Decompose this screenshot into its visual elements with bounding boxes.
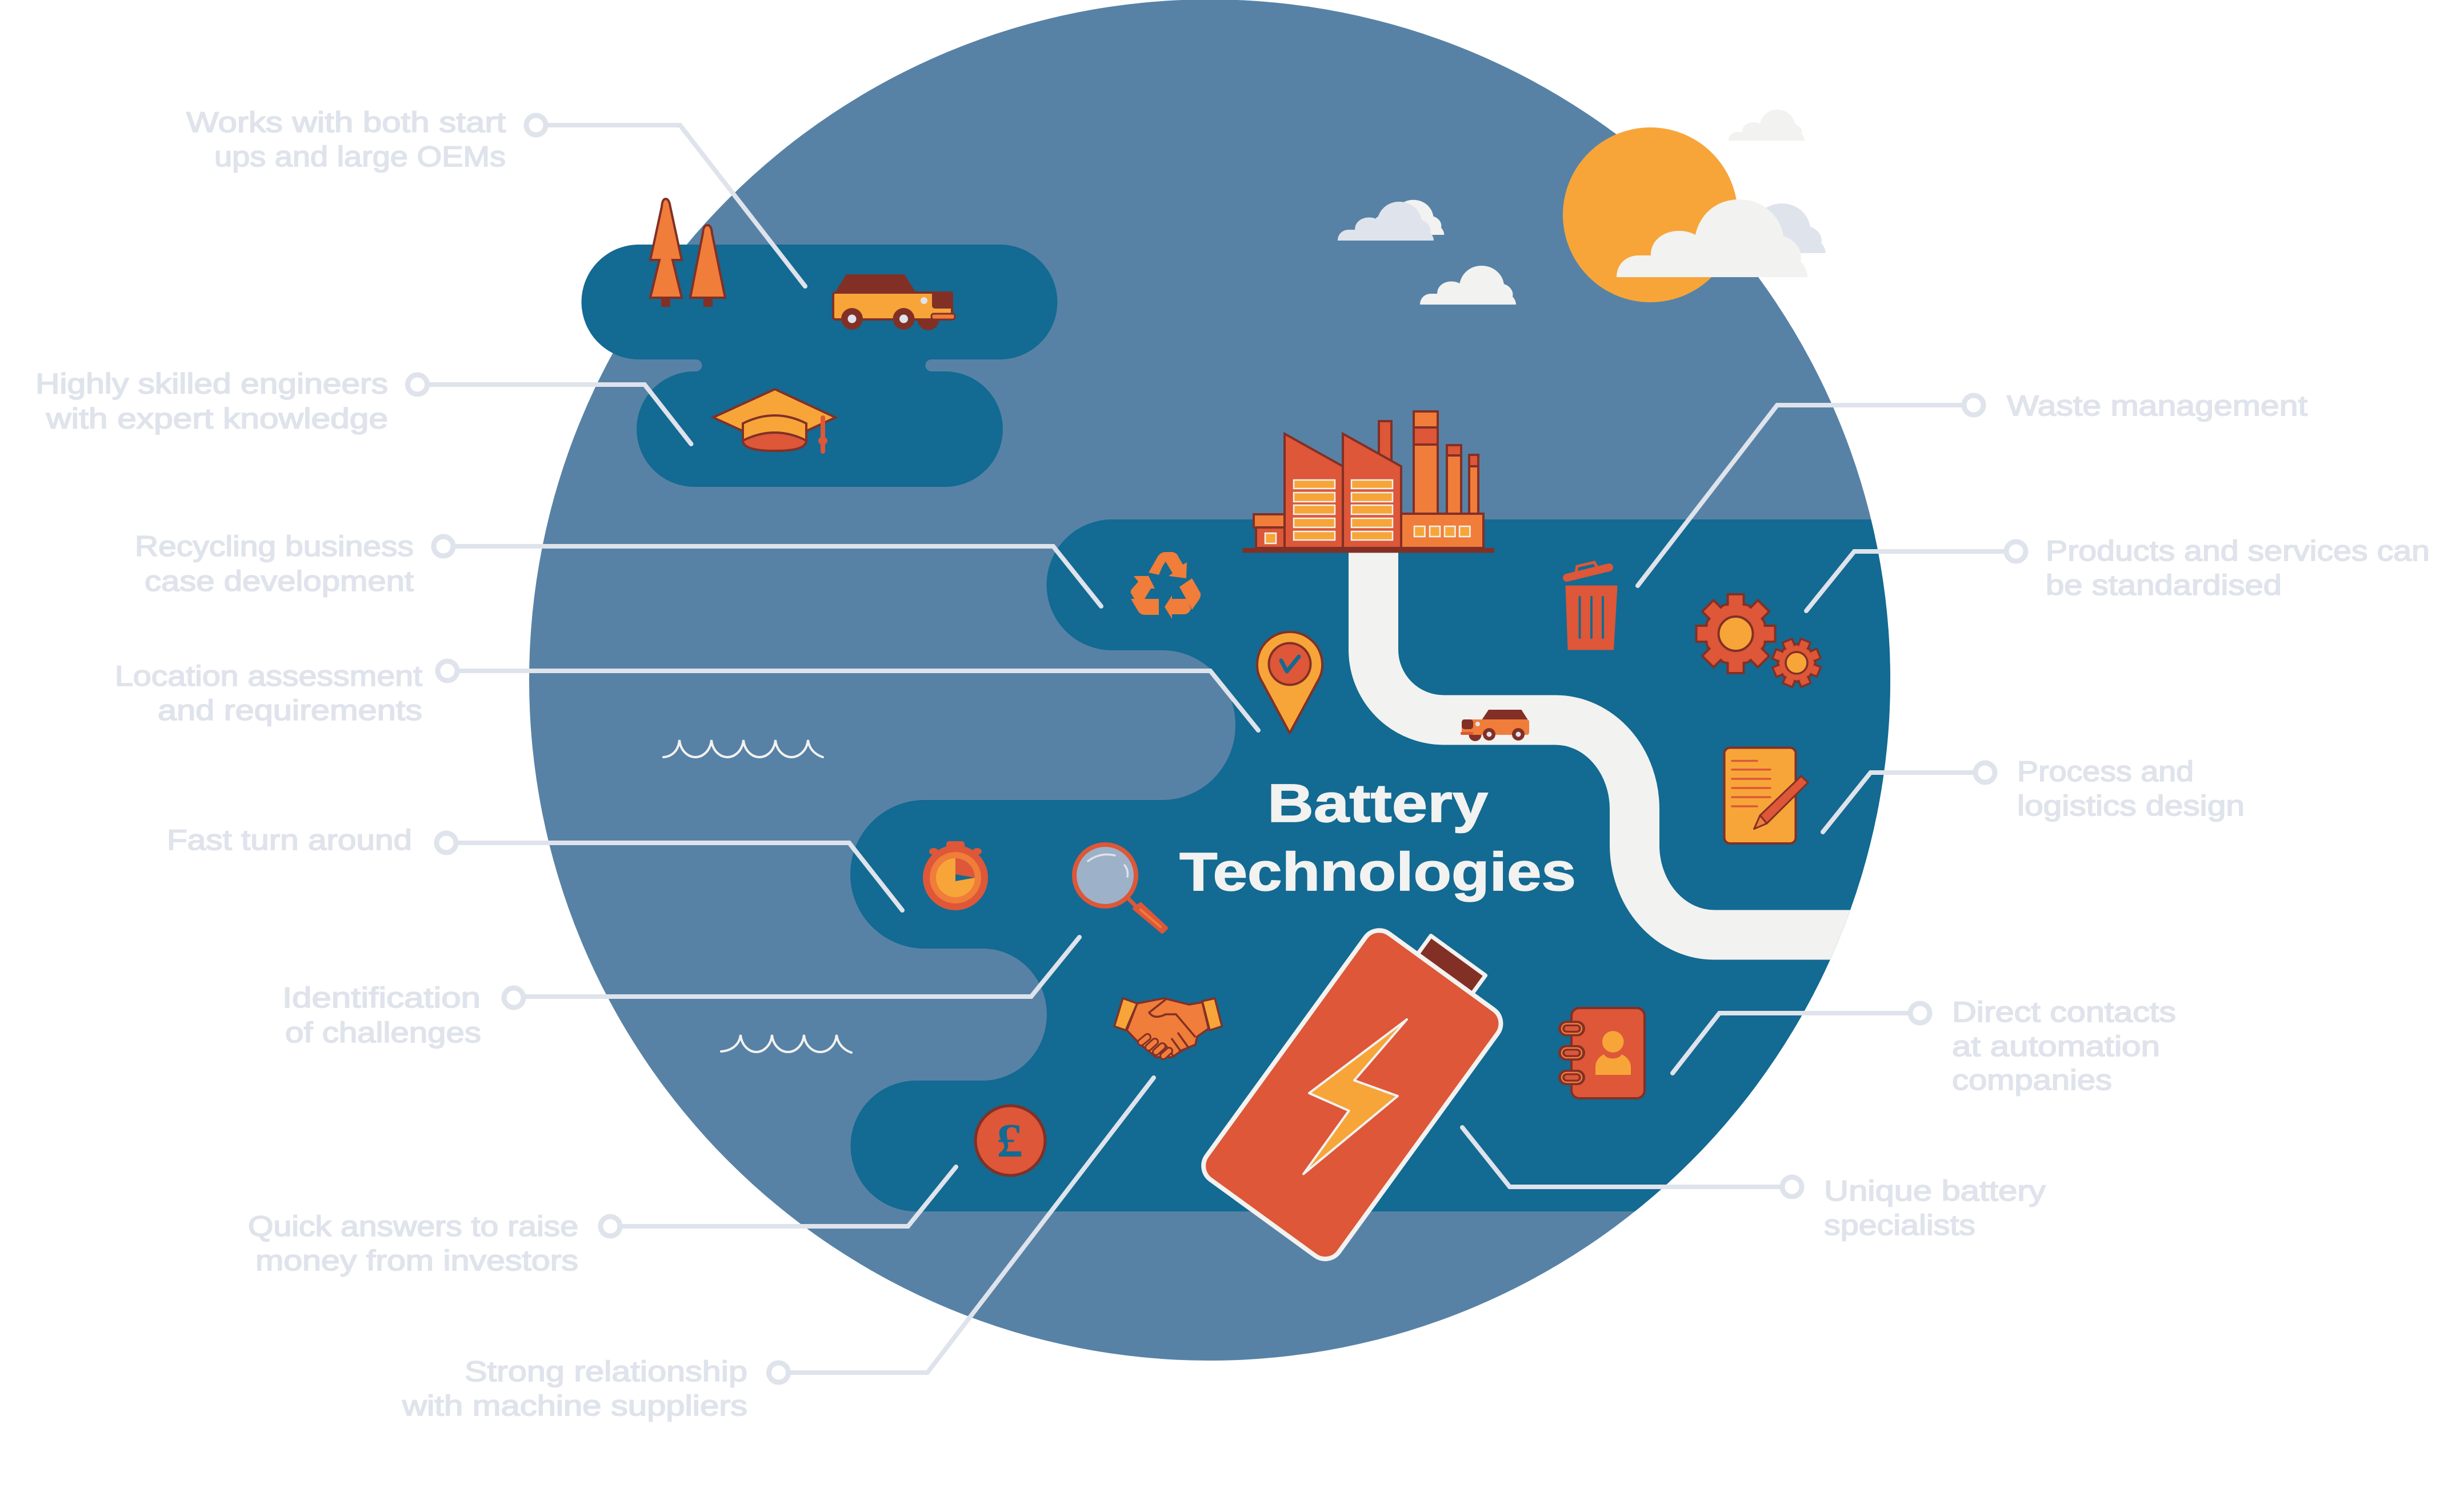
title: Battery <box>1267 773 1488 834</box>
icon: factory <box>1243 411 1494 553</box>
cloud: lower sky <box>1420 266 1516 305</box>
callout: products and services: Products and services can <box>2046 535 2430 567</box>
icon: recycling <box>1131 552 1201 619</box>
cloud pair in sky <box>1338 200 1444 241</box>
callout: highly skilled engineers: with expert knowledge <box>46 402 388 434</box>
cloud: front of sun <box>1617 199 1807 277</box>
callout: waste management: Waste management <box>2007 390 2307 422</box>
callout: recycling business case: case development <box>145 565 414 597</box>
sun <box>1563 127 1738 302</box>
icon: stopwatch <box>923 841 988 910</box>
background circle <box>529 0 1890 1361</box>
top island <box>582 245 1057 487</box>
callout: highly skilled engineers: Highly skilled engineers <box>35 368 388 400</box>
callout: quick answers <box>248 1167 956 1277</box>
callout: direct contacts: at automation <box>1952 1030 2160 1062</box>
icon: trash can <box>1566 562 1617 649</box>
callout: strong relationship: with machine suppliers <box>402 1390 747 1422</box>
icon: van <box>833 274 955 330</box>
callout: fast turn around <box>167 824 902 910</box>
callout: products and services: be standardised <box>2046 569 2282 601</box>
callout: recycling business case <box>135 530 1101 606</box>
callout: process and logistics: Process and <box>2017 755 2194 787</box>
waves lower <box>721 1035 851 1053</box>
callout: identification of challenges: Identification <box>282 982 481 1014</box>
callout: identification of challenges: of challenges <box>285 1017 481 1049</box>
icon: large gear <box>1696 594 1775 673</box>
callout: fast turn around: Fast turn around <box>167 824 412 856</box>
callout: waste management <box>1638 390 2307 586</box>
title: Technologies <box>1179 842 1576 902</box>
callout: direct contacts <box>1673 996 2176 1096</box>
waves upper <box>663 740 823 757</box>
callout: location assessment <box>115 660 1258 730</box>
icon: pound coin <box>975 1106 1045 1175</box>
callout: highly skilled engineers <box>35 368 691 444</box>
icon: battery <box>1197 923 1507 1266</box>
icon: contacts book <box>1558 1008 1645 1098</box>
callout: direct contacts: Direct contacts <box>1952 996 2176 1028</box>
icon: magnifying glass <box>1074 845 1166 932</box>
callout: quick answers: Quick answers to raise <box>248 1210 578 1242</box>
callout: location assessment: Location assessment <box>115 660 422 692</box>
icon: trees <box>650 199 725 307</box>
callout: identification of challenges <box>282 937 1079 1049</box>
callout: products and services <box>1806 535 2430 611</box>
icon: pound coin: £ <box>997 1114 1023 1167</box>
callout: quick answers: money from investors <box>255 1245 578 1277</box>
road <box>1374 549 1943 935</box>
callout: unique battery specialists: Unique battery <box>1824 1175 2046 1207</box>
dark land area <box>850 519 1943 1211</box>
callout: strong relationship: Strong relationship <box>465 1355 747 1387</box>
callout: direct contacts: companies <box>1952 1064 2112 1096</box>
callout: location assessment: and requirements <box>158 694 422 726</box>
icon: document and pencil <box>1725 747 1808 843</box>
icon: small gear <box>1773 639 1821 687</box>
icon: handshake <box>1114 998 1222 1057</box>
callout: works with start ups and OEMs: ups and large OEMs <box>214 141 506 173</box>
icon: small van on road <box>1461 710 1529 741</box>
callout: strong relationship <box>402 1078 1154 1422</box>
icon: graduation cap <box>713 389 835 451</box>
callout: works with start ups and OEMs: Works with both start <box>186 106 506 138</box>
callout: process and logistics: logistics design <box>2017 790 2245 822</box>
callout: unique battery specialists <box>1462 1127 2046 1241</box>
cloud: top right <box>1729 110 1805 141</box>
callout: process and logistics <box>1823 755 2245 832</box>
icon: location pin <box>1257 632 1322 733</box>
cloud: grey behind sun <box>1703 203 1826 253</box>
callout: recycling business case: Recycling business <box>135 530 414 562</box>
callout: works with start ups and OEMs <box>186 106 805 286</box>
callout: unique battery specialists: specialists <box>1824 1209 1975 1241</box>
title <box>1179 773 1576 902</box>
